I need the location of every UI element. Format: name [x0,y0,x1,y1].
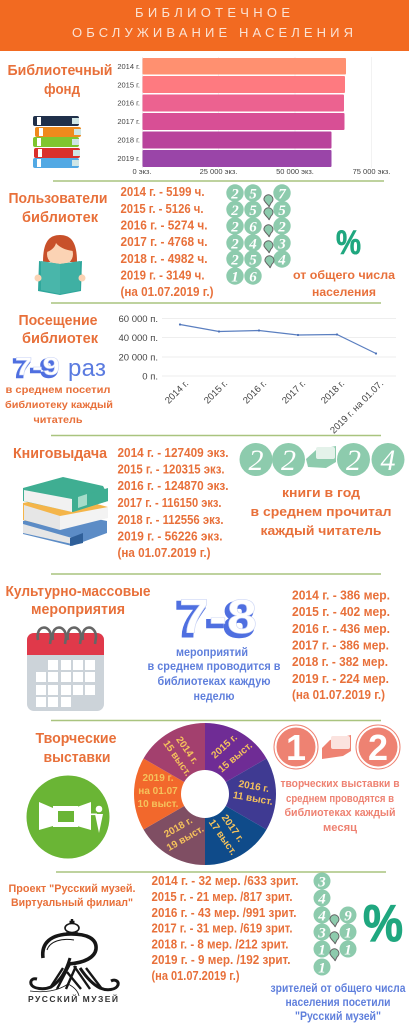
donut chart: exhibitions by year: 15 выст. [160,739,193,779]
list: museum events by year: (на 01.07.2019 г.) [152,969,240,983]
big number: 7-8: 7-8 [176,594,254,647]
list: events by year: 2018 г. - 382 мер. [292,655,388,669]
donut chart: exhibitions by year [134,723,276,865]
heading: library users: Пользователи [8,191,108,207]
big number badges: 1-2: 2 [368,727,388,768]
big number badges: 22-24: 4 [380,444,396,477]
number badges: museum share: 1 [318,942,326,958]
list: library users by year: 2018 г. - 4982 ч. [120,252,208,266]
number badges: share of users: 2 [230,203,239,219]
big number badges: 1-2 [274,725,400,769]
list: museum events by year: 2017 г. - 31 мер. /619 зрит. [152,922,292,936]
line chart: visits: 2018 г. [319,378,347,406]
donut chart: exhibitions by year: 2018 г. [162,815,195,840]
icon: small book stack [33,116,81,168]
list: museum events by year: 2016 г. - 43 мер. /991 зрит. [152,906,296,920]
number badges: museum share: 1 [344,942,352,958]
number badges: share of users: 5 [278,203,286,219]
list: library users by year: 2019 г. - 3149 ч. [120,268,204,282]
number badges: museum share [314,872,356,976]
number badges: share of users: 3 [277,236,286,252]
list: events by year: 2017 г. - 386 мер. [292,638,389,652]
big number badges: 1-2: 1 [286,727,306,768]
list: library users by year: 2016 г. - 5274 ч. [120,218,208,232]
heading: cultural events: Культурно-массовые [6,584,150,600]
number badges: share of users: 2 [230,236,239,252]
icon: large book stack [23,477,108,546]
list: book lending by year: 2016 г. - 124870 экз. [118,479,228,493]
caption: exhibitions per month: среднем проводятся в [286,793,394,805]
icon: reading girl [34,235,86,295]
header banner: ОБСЛУЖИВАНИЕ НАСЕЛЕНИЯ [72,25,353,40]
percent sign: users: % [336,224,361,262]
donut chart: exhibitions by year: 2015 г. [209,732,240,761]
heading: Russian Museum project: Виртуальный филиал" [11,897,133,909]
number badges: share of users: 6 [249,270,257,286]
caption: events per week: неделю [194,691,235,703]
caption: visits per reader: в среднем посетил [6,384,110,396]
heading: library fund: фонд [44,82,80,98]
list: events by year: 2015 г. - 402 мер. [292,605,390,619]
number badges: share of users: 5 [249,186,257,202]
caption: events per week: в среднем проводится в [148,661,280,673]
donut chart: exhibitions by year: 19 выст. [165,824,206,854]
number badges: share of users: 4 [277,252,286,268]
list: events by year: 2014 г. - 386 мер. [292,588,390,602]
logo: Russian Museum: РУССКИЙ МУЗЕЙ [28,993,118,1004]
caption: visits per reader [5,384,113,426]
big number: 7-8: 7-8 [179,591,257,644]
icon: calendar [27,628,104,711]
heading: book lending: Книговыдача [13,446,108,462]
caption: visits per reader: читатель [34,414,83,426]
number badges: share of users: 1 [231,270,239,286]
donut chart: exhibitions by year: 11 выст. [232,790,274,808]
caption: events per week: мероприятий [176,647,248,659]
caption: visits per reader: библиотеку каждый [5,399,113,411]
number badges: share of users: 2 [230,252,239,268]
list: book lending by year: 2019 г. - 56226 экз. [118,530,222,544]
number badges: share of users: 7 [278,186,286,202]
bar chart: library fund: 25 000 экз. [200,167,237,176]
caption: museum visitors [270,983,406,1023]
heading: library visits: Посещение [18,313,98,329]
bar chart: library fund: 75 000 экз. [353,167,390,176]
percent sign: museum: % [363,895,403,953]
list: book lending by year [118,446,228,560]
donut chart: exhibitions by year: 2019 г. [143,773,174,784]
heading: Russian Museum project [8,883,136,909]
list: museum events by year: 2018 г. - 8 мер. /212 зрит. [152,938,288,952]
heading: library fund [8,63,112,98]
heading: library users: библиотек [22,210,99,226]
bar chart: library fund: 2019 г. [117,154,140,163]
heading: creative exhibitions: Творческие [36,731,116,747]
list: book lending by year: 2017 г. - 116150 экз. [118,496,222,510]
caption: exhibitions per month: месяц [323,822,357,834]
bar chart: library fund: 2017 г. [117,117,140,126]
list: library users by year [120,185,214,299]
bar chart: library fund [117,57,390,176]
caption: events per week [148,647,280,703]
number badges: share of users: 6 [249,220,257,236]
line chart: visits: 0 п. [142,372,158,382]
line chart: visits [119,314,396,436]
list: book lending by year: (на 01.07.2019 г.) [118,546,210,560]
heading: library users [8,191,108,226]
donut chart: exhibitions by year: 2016 г. [238,779,270,795]
heading: library visits: библиотек [22,331,99,347]
heading: creative exhibitions [36,731,116,766]
list: events by year: 2016 г. - 436 мер. [292,622,390,636]
bar chart: library fund: 2018 г. [117,136,140,144]
number badges: share of users: 5 [249,203,257,219]
number badges: museum share: 1 [344,926,352,942]
big number badges: 22-24: 2 [346,444,361,477]
list: museum events by year: 2015 г. - 21 мер. /817 зрит. [152,890,292,904]
list: book lending by year: 2018 г. - 112556 экз. [118,513,224,527]
number badges: share of users: 2 [230,220,239,236]
heading: creative exhibitions: выставки [44,750,110,766]
caption: exhibitions per month: библиотеках каждый [284,807,396,819]
big number badges: 22-24: 2 [281,444,296,477]
list: events by year [292,588,390,702]
line chart: visits: 2014 г. [163,378,191,406]
line chart: visits: 60 000 п. [119,314,158,325]
number badges: museum share: 9 [344,908,352,924]
caption: museum visitors: "Русский музей" [295,1011,381,1023]
line chart: visits: 40 000 п. [119,333,158,344]
line chart: visits: 20 000 п. [119,352,158,364]
bar chart: library fund: 50 000 экз. [276,167,314,176]
line chart: visits: 2017 г. [280,378,308,406]
number badges: museum share: 3 [317,874,326,890]
number badges: museum share: 1 [318,960,326,976]
caption: books per year: книги в год [282,486,360,500]
list: book lending by year: 2015 г. - 120315 экз. [118,462,224,476]
list: library users by year: 2017 г. - 4768 ч. [120,235,208,249]
list: events by year: (на 01.07.2019 г.) [292,688,385,702]
bar chart: library fund: 2015 г. [117,80,140,90]
donut chart: exhibitions by year: 2014 г. [173,735,200,767]
caption: exhibitions per month [280,778,400,834]
donut chart: exhibitions by year: 2017 г. [219,813,246,845]
line chart: visits: 2019 г. на 01.07. [328,378,386,436]
number badges: share of users: 2 [230,186,239,202]
number badges: museum share: 4 [317,892,326,908]
bar chart: library fund: 0 экз. [133,167,151,176]
heading: cultural events: мероприятия [31,602,125,618]
list: museum events by year: 2019 г. - 9 мер. /192 зрит. [152,953,290,967]
big number: 7-9 times [13,353,106,383]
list: library users by year: (на 01.07.2019 г.) [120,285,214,299]
caption: books per year: каждый читатель [260,524,382,538]
caption: events per week: библиотеках каждую [158,676,271,688]
header banner: БИБЛИОТЕЧНОЕ [135,5,290,20]
caption: share of population: населения [312,287,376,299]
big number: 7-9 times: 7-9 [13,355,58,383]
header banner [0,0,409,51]
logo: Russian Museum [28,919,118,1004]
bar chart: library fund: 2016 г. [117,98,140,108]
number badges: share of users: 5 [249,252,257,268]
heading: Russian Museum project: Проект "Русский музей. [8,883,136,895]
line chart: visits: 2015 г. [202,378,230,406]
list: library users by year: 2015 г. - 5126 ч. [120,202,204,216]
donut chart: exhibitions by year: 17 выст. [206,818,239,858]
caption: books per year [250,486,392,538]
heading: cultural events [6,584,150,618]
list: museum events by year: 2014 г. - 32 мер. /633 зрит. [152,874,298,888]
caption: museum visitors: населения посетили [286,997,390,1009]
caption: share of population [293,270,396,299]
list: library users by year: 2014 г. - 5199 ч. [120,185,204,199]
big number: 7-9 times: 7-9 [15,353,60,381]
list: museum events by year [152,874,298,983]
list: events by year: 2019 г. - 224 мер. [292,672,389,686]
heading: library visits [18,313,99,347]
number badges: share of users: 2 [277,220,286,236]
big number badges: 22-24: 2 [248,444,264,477]
number badges: share of users: 4 [248,236,257,252]
big number badges: 22-24 [240,443,404,477]
bar chart: library fund: 2014 г. [117,62,140,71]
list: book lending by year: 2014 г. - 127409 экз. [118,446,228,460]
big number: 7-9 times: раз [68,355,106,382]
number badges: share of users [226,184,291,286]
donut chart: exhibitions by year: 10 выст. [138,799,179,810]
line chart: visits: 2016 г. [241,378,269,406]
number badges: museum share: 3 [317,926,326,942]
icon: exhibition presenter [26,776,110,858]
donut chart: exhibitions by year: 15 выст. [216,740,255,775]
number badges: museum share: 4 [317,908,326,924]
caption: share of population: от общего числа [293,270,396,282]
donut chart: exhibitions by year: на 01.07 [138,786,178,797]
heading: library fund: Библиотечный [8,63,112,79]
caption: exhibitions per month: творческих выставки в [280,778,400,790]
caption: books per year: в среднем прочитал [250,505,392,519]
